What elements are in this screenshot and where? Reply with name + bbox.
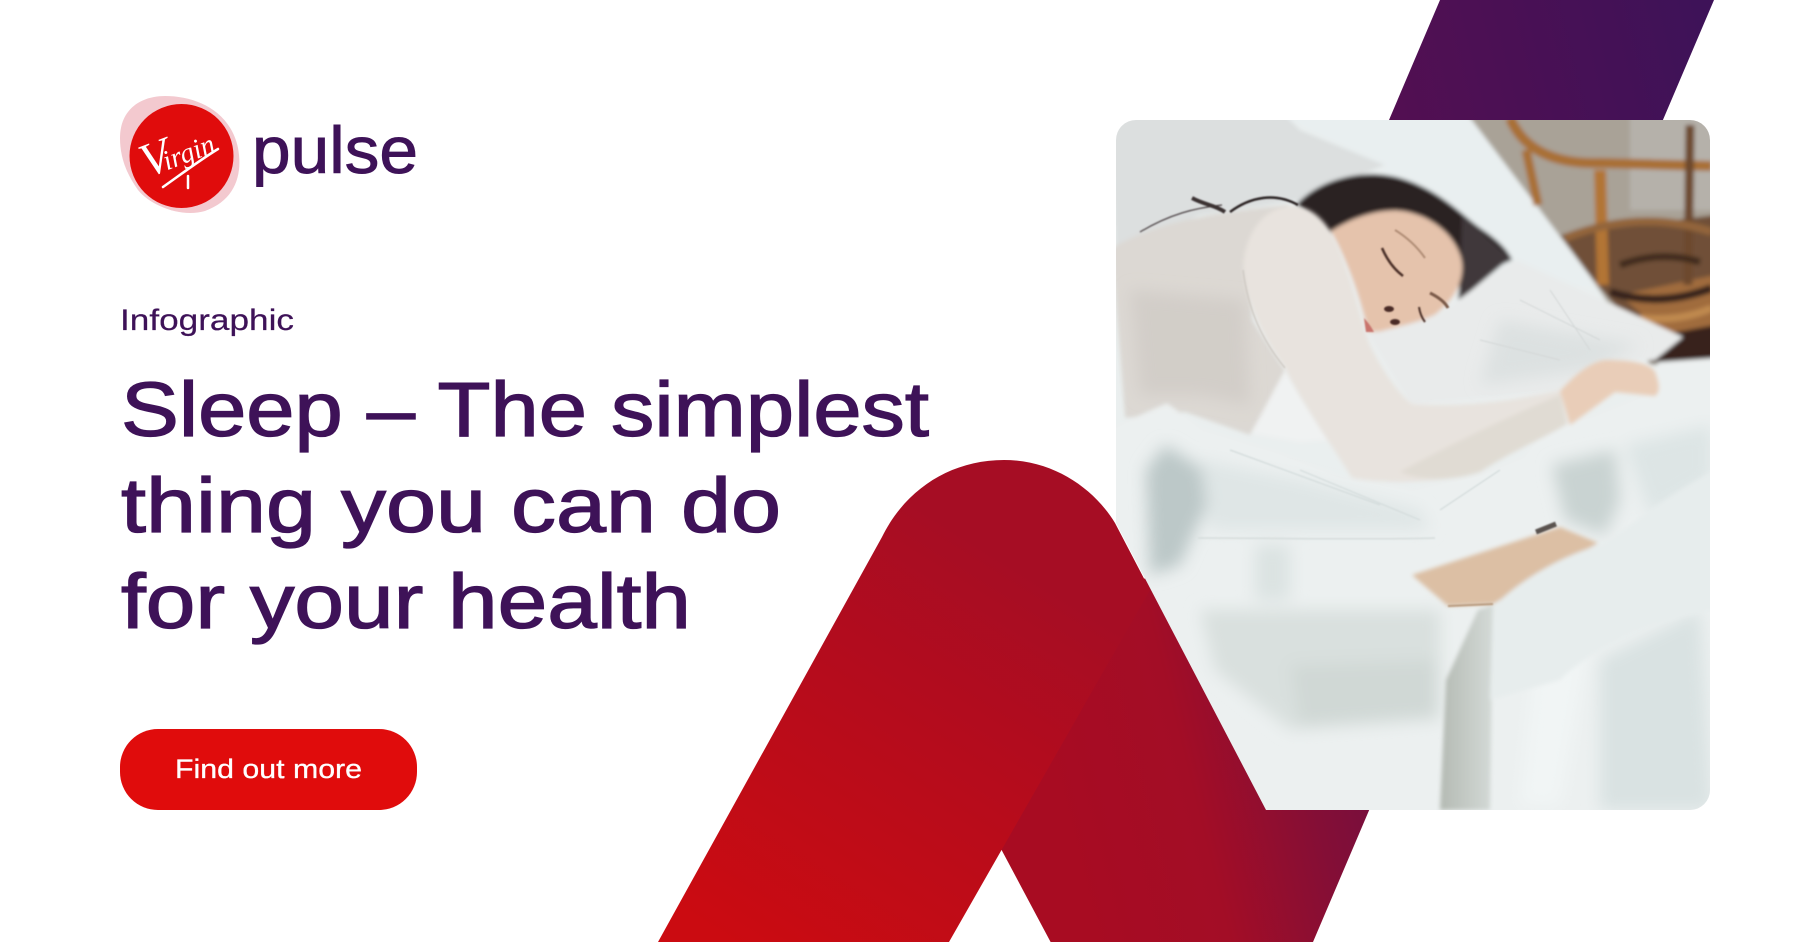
eyebrow: Infographic: Infographic xyxy=(120,304,294,337)
face xyxy=(1330,211,1462,332)
duvet xyxy=(1140,354,1710,417)
vertical fold xyxy=(1440,605,1493,810)
phone xyxy=(1412,527,1598,606)
logo: Virgin Pulse xyxy=(120,96,418,213)
photo foreground details xyxy=(1244,204,1661,810)
torso xyxy=(1112,205,1290,435)
hair xyxy=(1296,174,1512,300)
wordmark: pulse: pulse xyxy=(252,113,418,187)
photo base layers xyxy=(1110,115,1715,815)
title xyxy=(121,367,929,645)
title: for your health xyxy=(121,559,691,645)
shape: dark diagonal band xyxy=(1000,0,1714,942)
photo fine lines xyxy=(1140,198,1600,606)
title: Sleep – The simplest xyxy=(121,367,929,453)
button: Find out more: Find out more xyxy=(175,754,362,784)
photo soft shading xyxy=(1130,290,1712,810)
button: Find out more xyxy=(120,729,417,810)
hand xyxy=(1560,360,1659,425)
right duvet lobe xyxy=(1502,548,1587,682)
photo: woman sleeping in bed xyxy=(1110,115,1715,815)
title: thing you can do xyxy=(121,463,781,549)
icon: pink blob xyxy=(120,96,239,213)
arm xyxy=(1243,206,1567,482)
icon: Virgin wordmark: Virgin xyxy=(132,112,221,188)
pillow xyxy=(1386,291,1686,364)
icon: red circle xyxy=(130,104,234,208)
shape: red diagonal leg with rounded apex xyxy=(658,460,1150,942)
